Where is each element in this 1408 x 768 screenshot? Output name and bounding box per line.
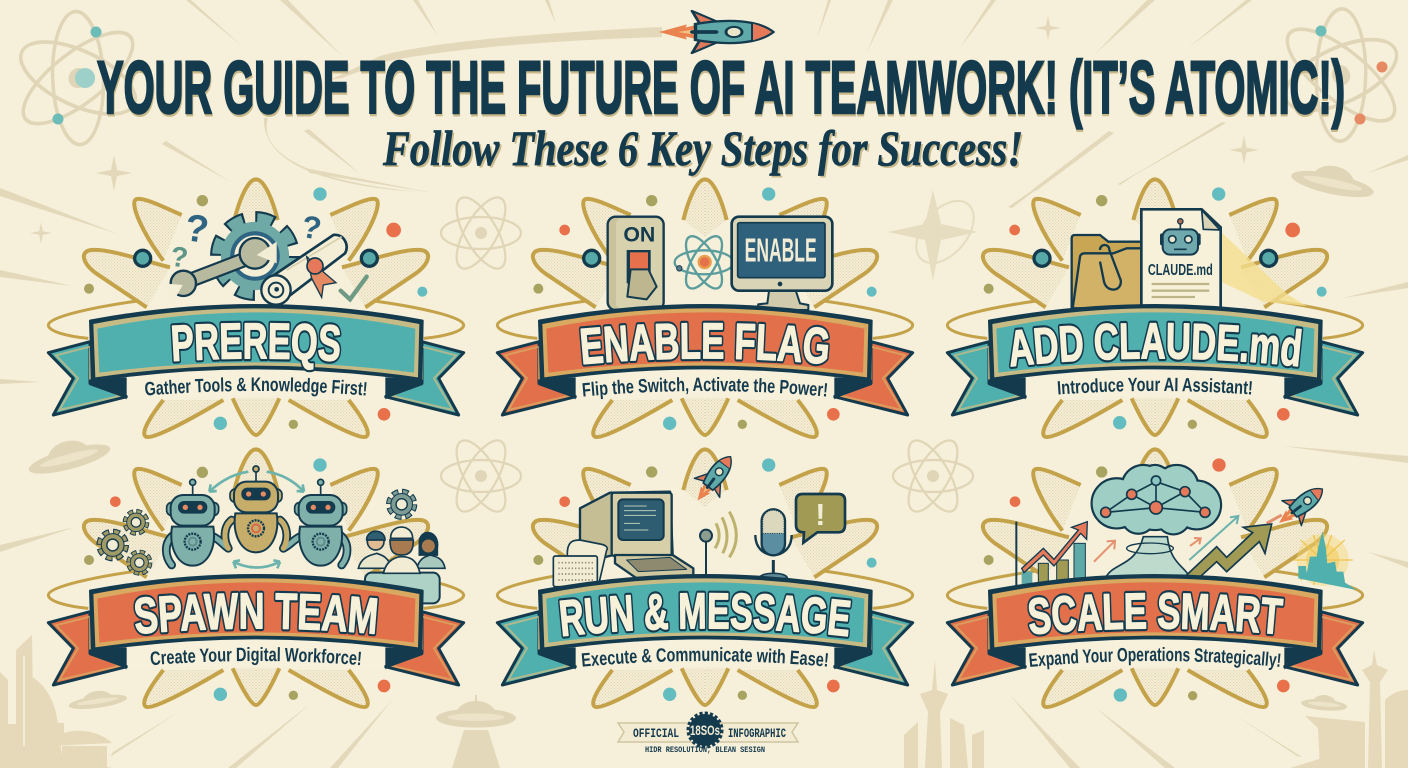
icon: question marks: ? — [168, 241, 190, 275]
icon: gears left — [99, 512, 150, 573]
icon: switch: ON — [623, 223, 655, 247]
star burst — [497, 449, 913, 707]
icons: computer, rocket, antenna, microphone — [533, 447, 877, 701]
icon: speech bubble: ! — [815, 498, 825, 532]
icon: city burst — [1293, 532, 1357, 590]
icon: computer — [580, 492, 693, 578]
star burst — [497, 179, 913, 437]
icon: gear right — [389, 492, 414, 517]
heading: ADD CLAUDE.md — [1010, 322, 1302, 367]
rocket: top centre — [659, 11, 773, 53]
icon: people — [358, 527, 445, 573]
icon: arrows — [209, 472, 304, 568]
icon: antenna and waves — [700, 512, 736, 577]
icon: speech bubble — [796, 494, 845, 543]
atom: top right — [1256, 0, 1408, 166]
icon: question marks — [168, 206, 324, 275]
icon: atom — [675, 231, 733, 294]
subtitle: Follow These 6 Key Steps for Success! — [384, 122, 1025, 178]
icon: rocket — [685, 447, 743, 510]
ribbon — [497, 305, 913, 415]
heading: SCALE SMART — [1027, 590, 1286, 637]
caption: Introduce Your AI Assistant! — [1058, 378, 1252, 394]
subtitle: Follow These 6 Key Steps for Success! — [382, 120, 1023, 176]
footer ribbon — [618, 723, 798, 742]
icon: document: CLAUDE.md — [1148, 262, 1213, 279]
icon: question marks: ? — [182, 206, 211, 252]
icon: robot arms — [166, 520, 347, 565]
atom: middle lower left — [441, 433, 521, 519]
icon: mushroom cloud — [1093, 466, 1220, 579]
dots — [84, 187, 427, 430]
caption: Gather Tools & Knowledge First! — [145, 377, 367, 396]
icon: diploma scroll — [261, 235, 347, 305]
ribbon — [48, 575, 464, 685]
heading: PREREQS — [172, 322, 340, 370]
icon: left growth chart — [1016, 522, 1087, 588]
atom: top left — [0, 0, 165, 170]
footer left text: OFFICIAL — [633, 726, 679, 741]
ribbon — [497, 575, 913, 685]
panel: spawn team — [46, 447, 466, 709]
dots — [533, 458, 877, 701]
icons: tools and knowledge — [84, 187, 427, 430]
footer small text: HIDR RESOLUTION, BLEAN SESIGN — [645, 745, 765, 755]
panel: run & message — [496, 447, 914, 709]
heading — [578, 320, 830, 367]
skyline silhouette — [0, 635, 1408, 768]
seal text: 18SOs — [690, 722, 720, 738]
icons: chart, mushroom cloud, rocket, city — [984, 458, 1357, 702]
caption: Execute & Communicate with Ease! — [582, 647, 828, 667]
icon: light beam — [1221, 232, 1307, 306]
star burst — [947, 449, 1363, 707]
panel: scale smart — [946, 447, 1364, 709]
panel: add claude.md — [946, 177, 1364, 439]
star burst — [48, 179, 464, 437]
footer stamp — [618, 714, 798, 755]
footer right text: INFOGRAPHIC — [728, 726, 786, 741]
icon: document — [1141, 209, 1221, 310]
icons: switch, atom, monitor — [533, 187, 877, 430]
dots — [533, 187, 877, 430]
icon: monitor: ENABLE — [745, 233, 817, 270]
caption: Flip the Switch, Activate the Power! — [582, 377, 828, 400]
icon: switch — [608, 217, 664, 310]
caption: Create Your Digital Workforce! — [150, 647, 361, 666]
heading: RUN & MESSAGE — [560, 592, 851, 637]
heading — [133, 590, 380, 636]
heading: ENABLE FLAG — [580, 322, 828, 365]
UFOs — [24, 158, 1377, 768]
dots — [984, 458, 1290, 702]
dots — [84, 458, 390, 701]
star burst — [947, 179, 1363, 437]
heading: SCALE SMART — [1028, 592, 1284, 634]
ribbon — [947, 305, 1363, 415]
icon: wrench — [163, 238, 277, 302]
heading: ENABLE FLAG — [578, 320, 830, 367]
icon: robots — [167, 466, 347, 566]
star burst — [48, 449, 464, 707]
panel: enable flag — [496, 177, 914, 439]
atom: middle upper — [441, 190, 521, 276]
panel: prereqs — [46, 177, 466, 439]
icon: monitor — [732, 217, 832, 310]
ribbon — [48, 305, 464, 415]
atom: middle lower right — [893, 433, 973, 519]
ribbon — [947, 575, 1363, 685]
heading: ADD CLAUDE.md — [1008, 320, 1304, 369]
compass star — [888, 190, 985, 280]
icon: folder — [1072, 235, 1143, 310]
icon: microphone — [755, 509, 792, 578]
caption: Expand Your Operations Strategically! — [1029, 647, 1280, 670]
icon: gear — [218, 219, 292, 293]
icons: robots, gears, people — [84, 458, 445, 701]
icon: check mark — [341, 277, 367, 299]
icon: printer paper — [553, 540, 607, 587]
icon: tablet — [365, 573, 440, 603]
heading: SPAWN TEAM — [134, 592, 378, 634]
heading: SPAWN TEAM — [133, 590, 380, 636]
icons: folder and document — [984, 187, 1327, 429]
icon: right growth arrow — [1187, 524, 1272, 580]
dots — [984, 187, 1327, 429]
icon: small arrows — [1094, 515, 1282, 562]
badge seal — [689, 714, 721, 746]
heading: PREREQS — [170, 320, 342, 372]
icon: question marks: ? — [299, 208, 324, 247]
heading: RUN & MESSAGE — [558, 590, 852, 639]
icon: rocket — [1269, 477, 1332, 535]
